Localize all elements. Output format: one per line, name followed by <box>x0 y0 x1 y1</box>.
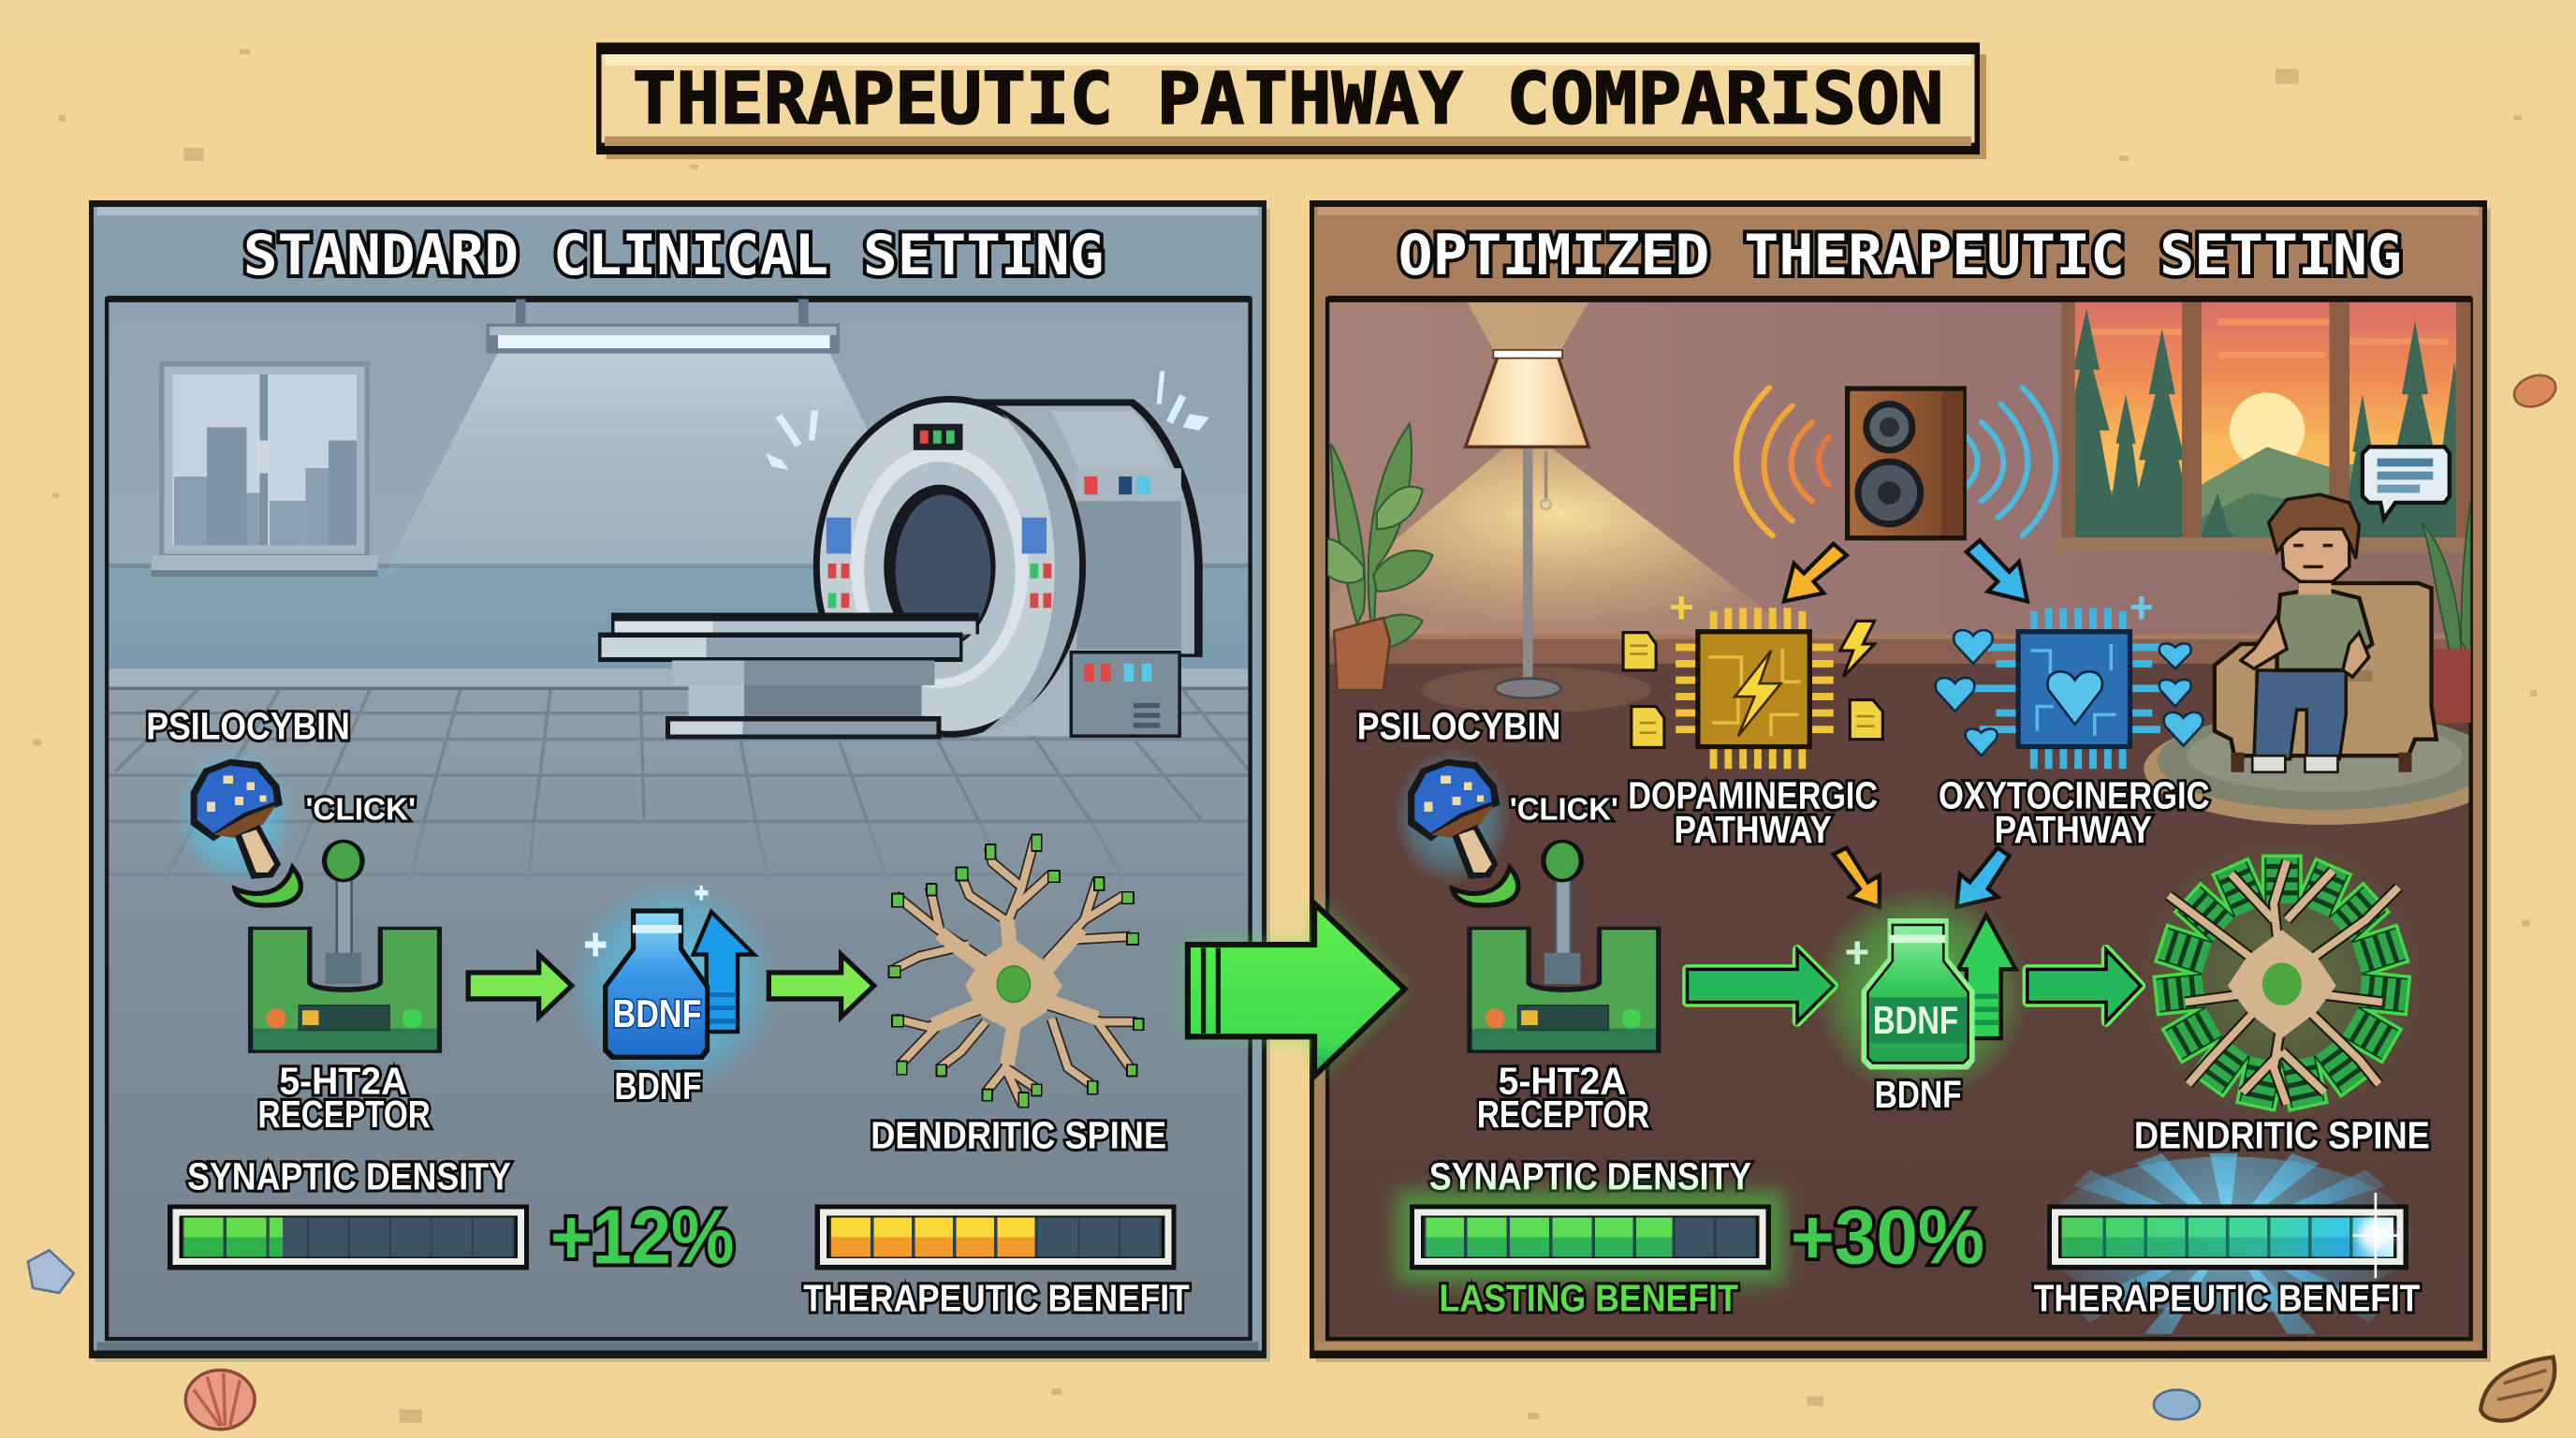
arrow: speaker to dopaminergic <box>1784 544 1847 601</box>
speech bubble <box>2363 447 2450 520</box>
label: psilocybin: PSILOCYBIN <box>146 705 350 748</box>
scene: cozy room <box>1327 299 2506 1339</box>
label: 5-HT2A receptor <box>1477 1060 1649 1136</box>
label: 5-HT2A receptor <box>258 1060 431 1136</box>
MRI patient table <box>598 613 979 740</box>
scene frame <box>1327 299 2471 1339</box>
panel heading: STANDARD CLINICAL SETTING <box>243 224 1104 288</box>
icon: BDNF bottle green with up arrow <box>1814 886 2030 1102</box>
ceiling lamp <box>487 299 840 353</box>
progress bar: synaptic density 12% <box>168 1204 529 1269</box>
decoration: blue pebble bottom <box>2154 1390 2200 1419</box>
neuron: dense dendritic spine <box>2134 838 2430 1127</box>
foliage clusters <box>2155 855 2409 1108</box>
sparkle plus <box>585 886 708 956</box>
decoration: tan shell lower right <box>2481 1357 2554 1420</box>
decoration: pink seashell <box>185 1371 255 1430</box>
MRI scanner <box>813 396 1203 738</box>
label: synaptic density: SYNAPTIC DENSITY <box>1429 1154 1751 1197</box>
icon: click crescent <box>235 868 300 905</box>
sparkle plus <box>1847 942 1868 964</box>
label: BDNF: BDNF <box>614 1064 701 1108</box>
label: psilocybin: PSILOCYBIN <box>1357 705 1560 748</box>
label: dendritic spine: DENDRITIC SPINE <box>871 1114 1166 1157</box>
stat: plus 30 percent: +30% <box>1791 1194 1984 1280</box>
label: 5-HT2A receptor: 5-HT2A <box>1499 1060 1627 1103</box>
scene: clinical room <box>109 420 1249 1337</box>
arrow: dopaminergic to BDNF <box>1834 847 1880 907</box>
panel heading: OPTIMIZED THERAPEUTIC SETTING <box>1398 224 2402 288</box>
icon: oxytocinergic chip <box>1936 596 2203 769</box>
label: click: 'CLICK' <box>305 793 416 828</box>
label: oxytocinergic pathway: PATHWAY <box>1995 808 2152 851</box>
arrow: receptor to BDNF <box>468 955 572 1017</box>
label: lasting benefit: LASTING BENEFIT <box>1439 1276 1738 1319</box>
icon: document and spark decorations <box>1623 596 1882 747</box>
decoration: orange shell right <box>2510 370 2560 412</box>
icon: dopaminergic chip <box>1676 608 1834 769</box>
label: BDNF: BDNF <box>1875 1073 1962 1116</box>
icon: mushroom <box>1393 747 1512 886</box>
bottle text: BDNF <box>1873 998 1958 1042</box>
label: oxytocinergic pathway <box>1939 773 2210 851</box>
neuron: sparse dendritic spine <box>889 834 1144 1108</box>
window <box>151 361 378 577</box>
label: dopaminergic pathway: DOPAMINERGIC <box>1628 773 1878 816</box>
label: therapeutic benefit: THERAPEUTIC BENEFIT <box>803 1276 1190 1319</box>
bottle text: BDNF <box>613 991 701 1035</box>
window at sunset <box>2054 302 2471 552</box>
icon: mushroom <box>176 747 294 886</box>
label: 5-HT2A receptor: 5-HT2A <box>279 1060 407 1103</box>
arrow: BDNF to dendritic spine <box>768 955 874 1017</box>
panel: optimized therapeutic setting <box>1310 200 2506 1362</box>
icon: 5-HT2A receptor joystick <box>1467 840 1661 1053</box>
light cone <box>381 353 914 579</box>
arrow: speaker to oxytocinergic <box>1967 540 2027 601</box>
big transition arrow <box>1188 903 1405 1076</box>
panel: standard clinical setting <box>89 200 1270 1362</box>
progress bar: therapeutic benefit optimized <box>2047 1193 2408 1278</box>
burst: blue rays behind therapeutic benefit <box>2043 1153 2411 1334</box>
stat: plus 12 percent: +12% <box>550 1194 735 1280</box>
decoration: blue pebble left <box>28 1250 74 1293</box>
title text: THERAPEUTIC PATHWAY COMPARISON <box>633 58 1943 140</box>
speaker <box>1845 386 1967 540</box>
scene frame <box>107 299 1251 1339</box>
label: dopaminergic pathway: PATHWAY <box>1674 808 1832 851</box>
label: 5-HT2A receptor: RECEPTOR <box>1477 1093 1649 1136</box>
arrow: receptor to BDNF <box>1687 949 1834 1022</box>
label: click: 'CLICK' <box>1510 793 1618 828</box>
label: dendritic spine: DENDRITIC SPINE <box>2134 1114 2430 1157</box>
title banner <box>596 43 1986 159</box>
arrow: BDNF to dendritic spine <box>2027 949 2141 1022</box>
rug <box>2144 724 2469 825</box>
label: therapeutic benefit: THERAPEUTIC BENEFIT <box>2034 1276 2421 1319</box>
sound waves orange <box>1736 388 1828 536</box>
floor lamp <box>1466 350 1588 698</box>
icon: 5-HT2A receptor joystick <box>248 840 442 1053</box>
plant left <box>1327 424 1432 690</box>
label: oxytocinergic pathway: OXYTOCINERGIC <box>1939 773 2210 816</box>
progress bar: therapeutic benefit standard <box>815 1204 1177 1269</box>
progress bar: synaptic density 30% <box>1397 1191 1784 1284</box>
label: dopaminergic pathway <box>1628 773 1878 851</box>
plant right <box>2422 501 2471 723</box>
icon: BDNF bottle with up arrow <box>568 877 779 1094</box>
person in armchair <box>2215 494 2437 772</box>
label: synaptic density: SYNAPTIC DENSITY <box>187 1154 511 1197</box>
sound waves blue <box>1967 388 2056 536</box>
arrow: oxytocinergic to BDNF <box>1956 847 2009 907</box>
label: 5-HT2A receptor: RECEPTOR <box>258 1093 431 1136</box>
sparks around MRI <box>766 372 1209 470</box>
icon: click crescent <box>1453 868 1518 905</box>
